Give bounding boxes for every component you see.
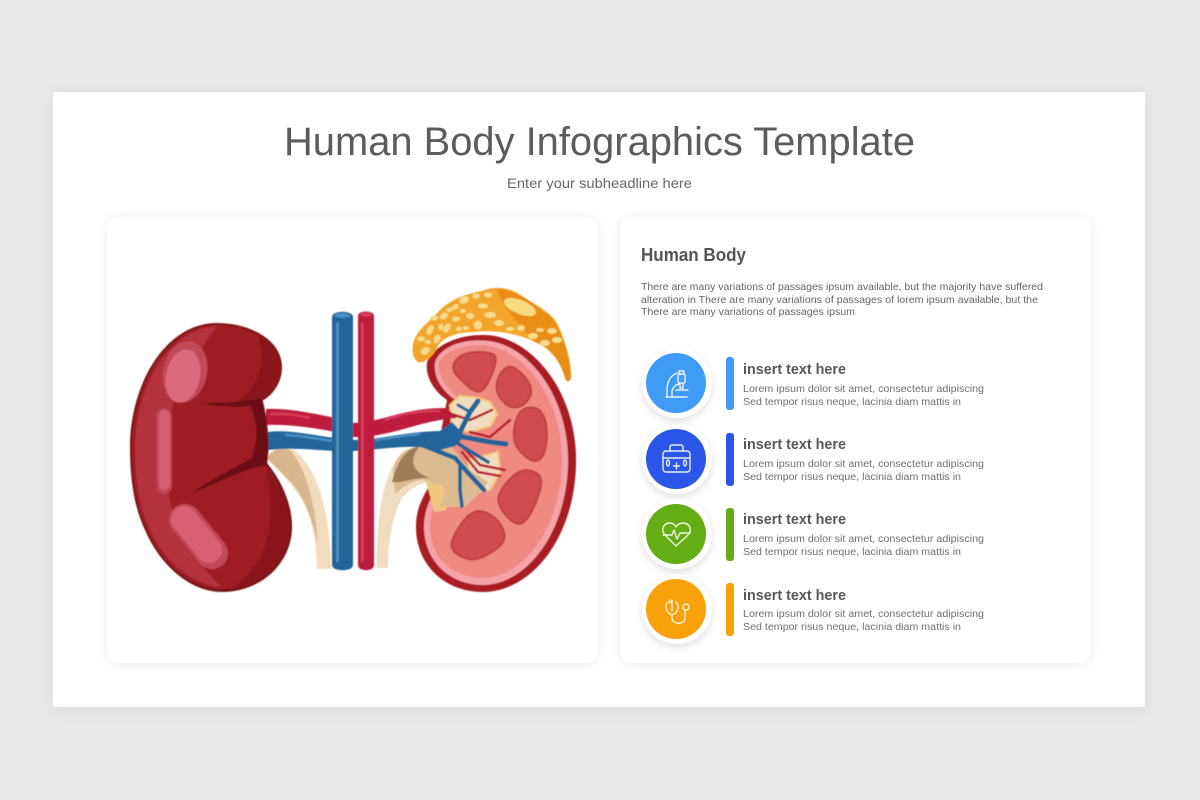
icon: heartbeat (663, 523, 690, 546)
kidney lobe shading (236, 334, 280, 402)
kidney highlights (157, 337, 213, 407)
accent bar (726, 357, 734, 410)
right kidney capsule (424, 340, 568, 585)
left renal vein (268, 431, 336, 451)
kidney left band (135, 326, 222, 587)
icon: toolbox (663, 445, 690, 472)
item text (743, 608, 984, 633)
item text: Lorem ipsum dolor sit amet, consectetur adipiscing (743, 608, 984, 620)
fat sinus (426, 482, 450, 512)
body paragraph: There are many variations of passages ipsum (641, 306, 855, 318)
kidney illustration (130, 288, 576, 592)
item title: insert text here (743, 361, 846, 378)
right kidney cortex (430, 345, 562, 578)
aorta (358, 312, 374, 570)
item text (743, 533, 984, 558)
right renal vein and branches (353, 401, 506, 506)
item text: Lorem ipsum dolor sit amet, consectetur adipiscing (743, 383, 984, 395)
right ureter (377, 447, 432, 568)
adrenal gland (413, 288, 571, 381)
accent bar (726, 583, 734, 636)
item text: Sed tempor risus neque, lacinia diam mattis in (743, 621, 961, 633)
subheadline: Enter your subheadline here (507, 175, 692, 191)
item title: insert text here (743, 587, 846, 604)
inferior vena cava (332, 312, 353, 570)
item text (743, 383, 984, 408)
badge (642, 499, 712, 569)
panel: kidney illustration card (107, 217, 598, 663)
item text (743, 458, 984, 483)
kidney pyramids (451, 352, 547, 559)
left renal artery (266, 409, 336, 432)
list item: medical kit (642, 424, 984, 494)
heading: Human Body: Human Body (641, 245, 746, 265)
item text: Sed tempor risus neque, lacinia diam mattis in (743, 546, 961, 558)
item text: Lorem ipsum dolor sit amet, consectetur adipiscing (743, 458, 984, 470)
panel: text card (620, 217, 1091, 663)
right kidney outer (416, 335, 576, 592)
body paragraph: alteration in There are many variations of passages of lorem ipsum available, but the (641, 294, 1038, 306)
list item: heart (642, 499, 984, 569)
body paragraph (641, 281, 1043, 318)
title: Human Body Infographics Template (284, 120, 915, 164)
slide panel (53, 92, 1145, 707)
list item: stethoscope (642, 574, 984, 644)
badge (642, 574, 712, 644)
left ureter (266, 448, 331, 569)
renal pelvis (393, 447, 488, 507)
red renal branches (445, 410, 510, 476)
left kidney (130, 323, 292, 592)
accent bar (726, 508, 734, 561)
item text: Sed tempor risus neque, lacinia diam mattis in (743, 471, 961, 483)
right renal artery (353, 408, 457, 437)
left kidney creases (192, 398, 268, 493)
item text: Lorem ipsum dolor sit amet, consectetur adipiscing (743, 533, 984, 545)
list item: microscope (642, 348, 984, 418)
item title: insert text here (743, 511, 846, 528)
item text: Sed tempor risus neque, lacinia diam mattis in (743, 396, 961, 408)
kidney outer body (132, 325, 289, 589)
badge (642, 424, 712, 494)
item title: insert text here (743, 436, 846, 453)
icon: microscope (666, 371, 688, 397)
body paragraph: There are many variations of passages ipsum available, but the majority have suffered (641, 281, 1043, 293)
badge (642, 348, 712, 418)
icon: stethoscope (666, 600, 689, 623)
accent bar (726, 433, 734, 486)
